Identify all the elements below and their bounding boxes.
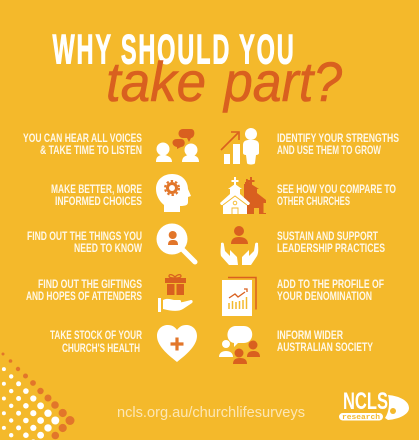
left column labels: INFORMED CHOICES [55,194,142,208]
left column labels: & TAKE TIME TO LISTEN [40,143,142,157]
left column labels: FIND OUT THE THINGS YOU [27,229,142,243]
logo: NCLS research: research [342,414,381,422]
logo: NCLS research: NCLS [343,388,388,415]
right column labels [277,131,399,354]
icon: report with line chart [222,278,256,316]
left column labels: YOU CAN HEAR ALL VOICES [23,131,142,145]
left column labels: NEED TO KNOW [74,241,142,255]
halftone dots [2,352,74,440]
left column labels: AND HOPES OF ATTENDERS [26,289,142,303]
icon: magnifier with person [156,224,195,262]
icon: group conversation [219,326,260,364]
right column labels: OTHER CHURCHES [277,194,350,208]
left column labels: MAKE BETTER, MORE [51,182,142,196]
icon: head with gear [156,174,191,212]
left column labels: TAKE STOCK OF YOUR [50,328,142,342]
icon: hands holding person [221,226,258,265]
title [52,26,342,113]
icon: people talking [156,129,199,162]
left column labels [23,131,142,355]
icon: growth chart and person [221,128,259,164]
left column labels: CHURCH'S HEALTH [62,341,140,355]
title: take [106,50,206,113]
left column labels: FIND OUT THE GIFTINGS [38,277,142,291]
icon: two churches [220,177,266,214]
icon: gift on hand [158,275,193,312]
title: WHY SHOULD YOU [52,26,296,73]
website url: ncls.org.au/churchlifesurveys [117,405,305,421]
right column labels: YOUR DENOMINATION [277,289,372,303]
title: part? [222,50,342,113]
icon: heart with cross [157,325,197,362]
right column labels: INFORM WIDER [277,328,343,342]
right column labels: AUSTRALIAN SOCIETY [277,340,374,354]
